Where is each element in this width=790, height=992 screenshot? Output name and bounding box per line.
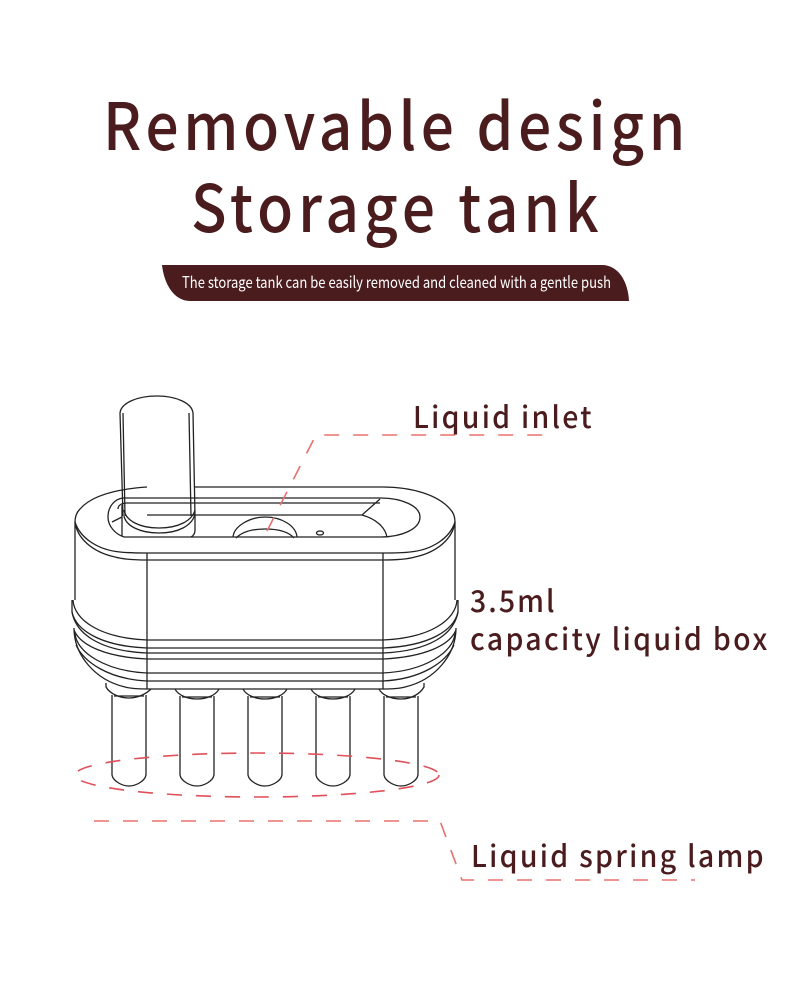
leader line: liquid spring lamp: [94, 821, 695, 880]
bottle: [120, 396, 195, 537]
title: [103, 74, 685, 251]
liquid pegs: [106, 683, 424, 786]
label: capacity: capacity liquid box: [470, 616, 767, 659]
tank body: [75, 522, 455, 689]
peg 2: [175, 689, 219, 786]
label: capacity: 3.5ml: [470, 578, 555, 621]
peg 1: [106, 683, 151, 786]
peg 4: [311, 689, 355, 786]
base rings: [72, 600, 458, 689]
product line drawing: storage tank: [72, 396, 458, 786]
leader line: liquid inlet: [267, 435, 546, 531]
peg 5: [379, 683, 424, 786]
subtitle banner: The storage tank can be easily removed and cleaned with a gentle push: [182, 269, 611, 293]
dashed ellipse: liquid spring lamp area: [75, 753, 439, 797]
tank rim: [75, 487, 455, 560]
label: liquid inlet: Liquid inlet: [413, 394, 592, 437]
title: Removable design: [103, 74, 685, 169]
peg 3: [243, 689, 287, 786]
title: Storage tank: [191, 156, 599, 251]
label: capacity: [470, 578, 767, 659]
subtitle banner: [162, 265, 629, 301]
label: liquid spring lamp: Liquid spring lamp: [471, 833, 764, 876]
